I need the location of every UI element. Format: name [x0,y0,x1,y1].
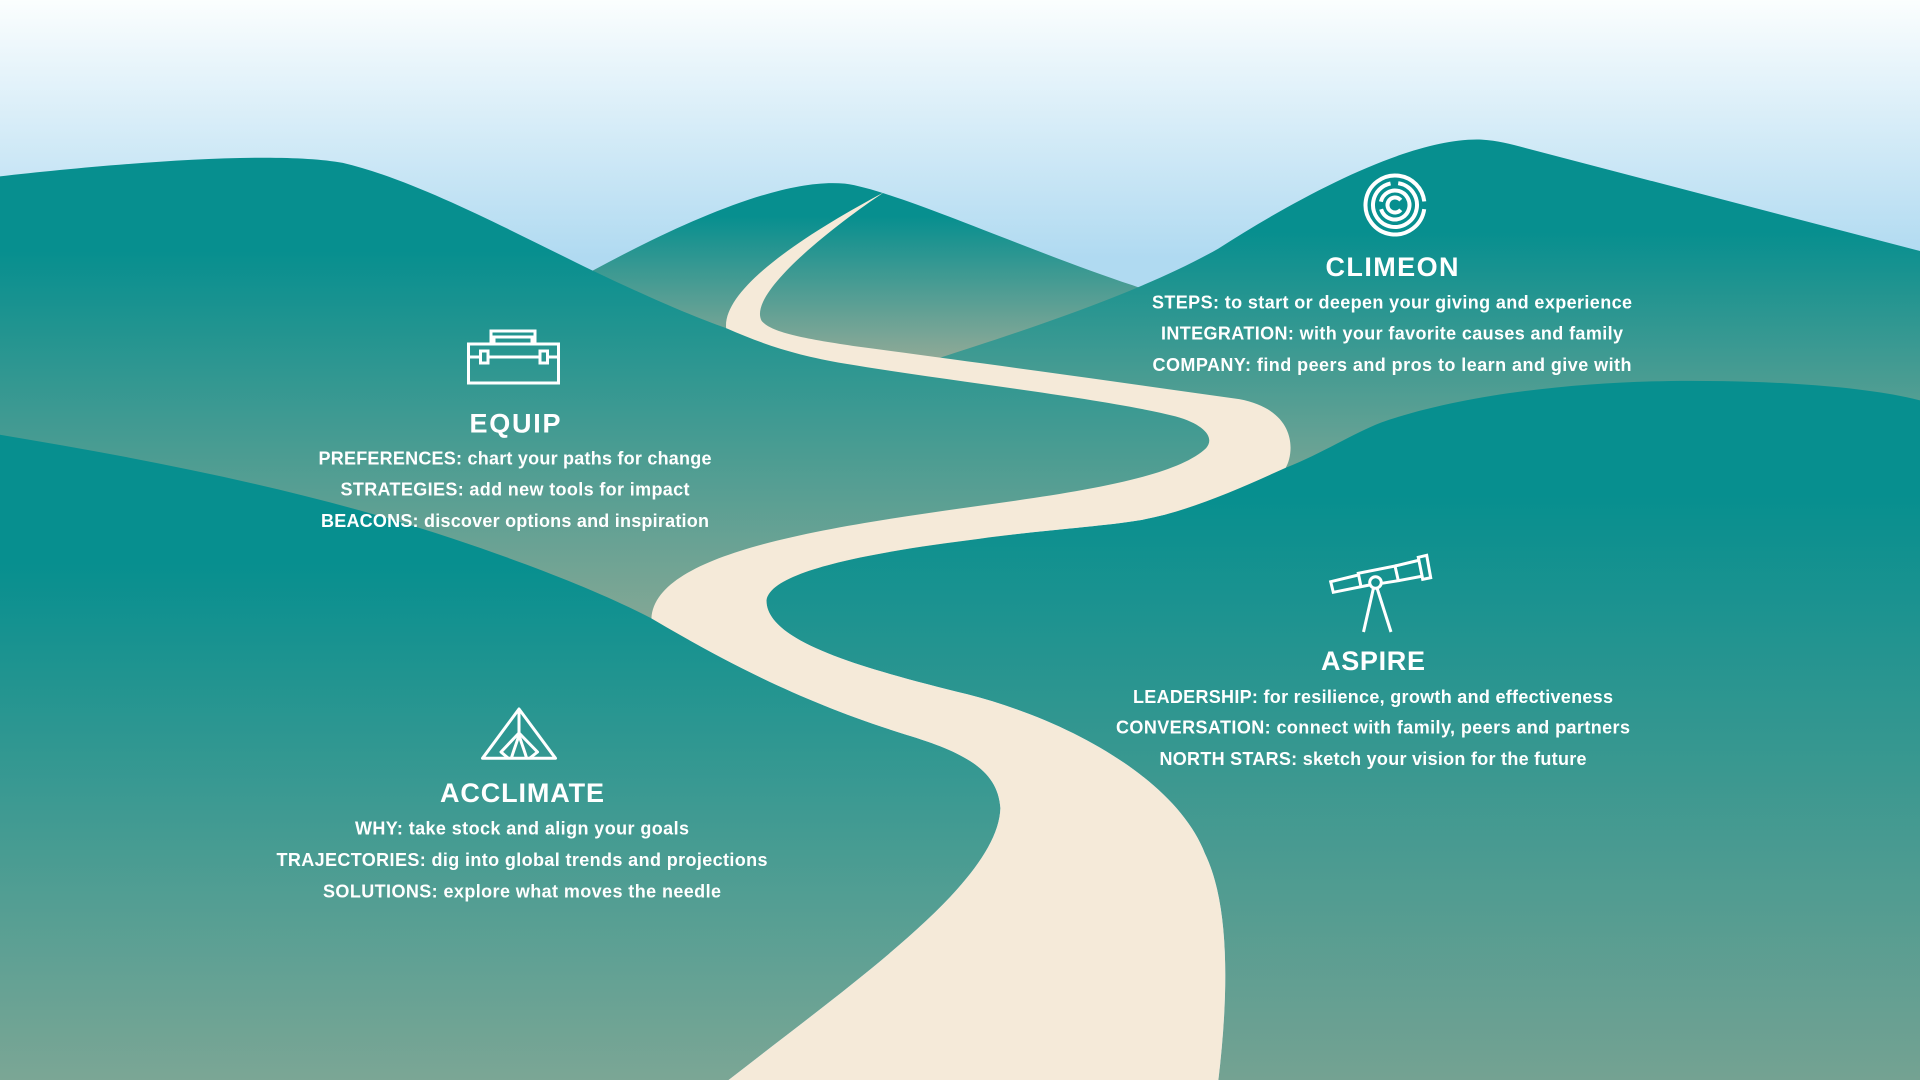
heading: climeon: CLIMEON [1326,252,1458,282]
panel: acclimate text [276,778,768,902]
hill: equip [0,158,1255,649]
text: why: WHY: take stock and align your goals [355,818,689,838]
icon: climeon logo [1362,172,1428,238]
text: solutions: SOLUTIONS: explore what moves the needle [323,882,721,902]
heading: acclimate: ACCLIMATE [440,778,604,808]
text: leadership: LEADERSHIP: for resilience, growth and effectiveness [1133,687,1613,707]
text: beacons: BEACONS: discover options and inspiration [321,511,709,531]
hill: climeon [937,140,1920,514]
text: strategies: STRATEGIES: add new tools for impact [340,480,690,500]
hill: far center [593,183,1163,416]
text: company: COMPANY: find peers and pros to learn and give with [1152,355,1632,375]
text: steps: STEPS: to start or deepen your giving and experience [1152,292,1632,312]
icon: telescope [1331,555,1431,632]
icon: toolbox [468,331,558,383]
hill: aspire [767,381,1920,1080]
hill: acclimate [0,435,1000,1080]
heading: equip: EQUIP [470,408,560,438]
heading: aspire: ASPIRE [1321,646,1425,676]
panel: climeon text [1152,252,1632,375]
text: conversation: CONVERSATION: connect with family, peers and partners [1116,718,1630,738]
text: trajectories: TRAJECTORIES: dig into global trends and projections [276,850,768,870]
text: integration: INTEGRATION: with your favorite causes and family [1161,324,1623,344]
panel: equip text [318,408,712,531]
panel: aspire text [1116,646,1630,769]
winding road [651,192,1291,1080]
text: north stars: NORTH STARS: sketch your vision for the future [1160,749,1586,769]
text: preferences: PREFERENCES: chart your paths for change [318,448,712,468]
icon: tent [482,709,556,758]
